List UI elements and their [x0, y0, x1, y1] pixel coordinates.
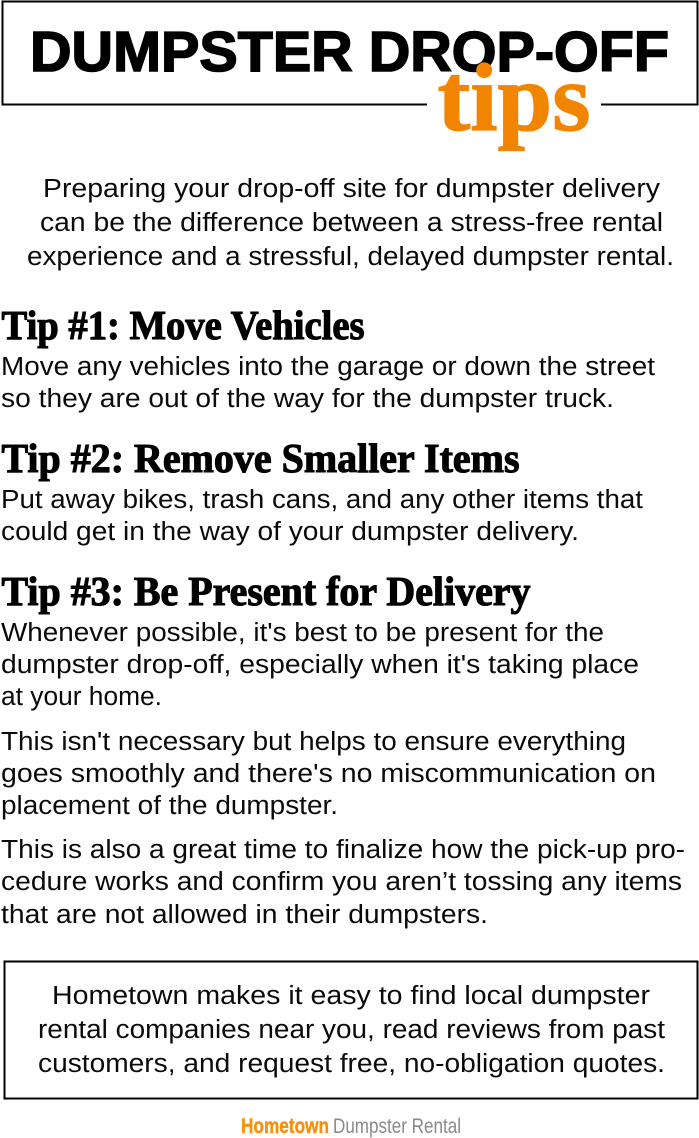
tip 3 third paragraph: that are not allowed in their dumpsters. [1, 901, 488, 929]
tip 3 second paragraph [1, 728, 656, 820]
tip 3 first paragraph: at your home. [1, 683, 162, 711]
tip 2 heading: Tip #2: Remove Smaller Items [2, 435, 520, 481]
intro paragraph: experience and a stressful, delayed dumpster rental. [27, 243, 674, 271]
tip 3 second paragraph: placement of the dumpster. [1, 792, 338, 820]
tip 3 [1, 568, 685, 929]
tips accent word: tips [438, 44, 590, 151]
callout frame [4, 962, 698, 1098]
callout text: rental companies near you, read reviews from past [38, 1016, 665, 1044]
intro paragraph [27, 175, 674, 271]
tip 3 second paragraph: goes smoothly and there's no miscommunication on [1, 760, 656, 788]
callout text [38, 982, 665, 1078]
tip 1 text: so they are out of the way for the dumpster truck. [1, 385, 614, 413]
tip 3 first paragraph: dumpster drop-off, especially when it's taking place [1, 651, 639, 679]
tip 2 [1, 435, 643, 546]
tip 1 heading: Tip #1: Move Vehicles [2, 302, 364, 348]
intro paragraph: can be the difference between a stress-free rental [40, 209, 663, 237]
title: DUMPSTER DROP-OFF [30, 20, 669, 84]
tip 1 text [1, 353, 655, 413]
tip 3 heading: Tip #3: Be Present for Delivery [2, 568, 531, 614]
footer logo [241, 1115, 461, 1138]
title frame [2, 2, 698, 104]
tip 3 second paragraph: This isn't necessary but helps to ensure everything [1, 728, 626, 756]
callout text: Hometown makes it easy to find local dumpster [52, 982, 651, 1010]
header: title box with tips [2, 2, 698, 151]
tip 1 [1, 302, 655, 413]
tip 3 third paragraph: cedure works and confirm you aren’t tossing any items [1, 868, 682, 896]
tip 1 text: Move any vehicles into the garage or down the street [1, 353, 655, 381]
tip 3 first paragraph: Whenever possible, it's best to be present for the [1, 619, 604, 647]
callout box [4, 962, 698, 1098]
tip 3 third paragraph [1, 836, 685, 929]
footer logo: Hometown [241, 1115, 329, 1138]
tip 2 text: Put away bikes, trash cans, and any other items that [1, 486, 643, 514]
tip 2 text [1, 486, 643, 546]
intro paragraph: Preparing your drop-off site for dumpster delivery [43, 175, 660, 203]
callout text: customers, and request free, no-obligation quotes. [38, 1050, 665, 1078]
tip 3 third paragraph: This is also a great time to finalize how the pick-up pro- [1, 836, 685, 864]
footer logo: Dumpster Rental [333, 1115, 461, 1138]
tip 3 first paragraph [1, 619, 639, 711]
tip 2 text: could get in the way of your dumpster delivery. [1, 518, 579, 546]
